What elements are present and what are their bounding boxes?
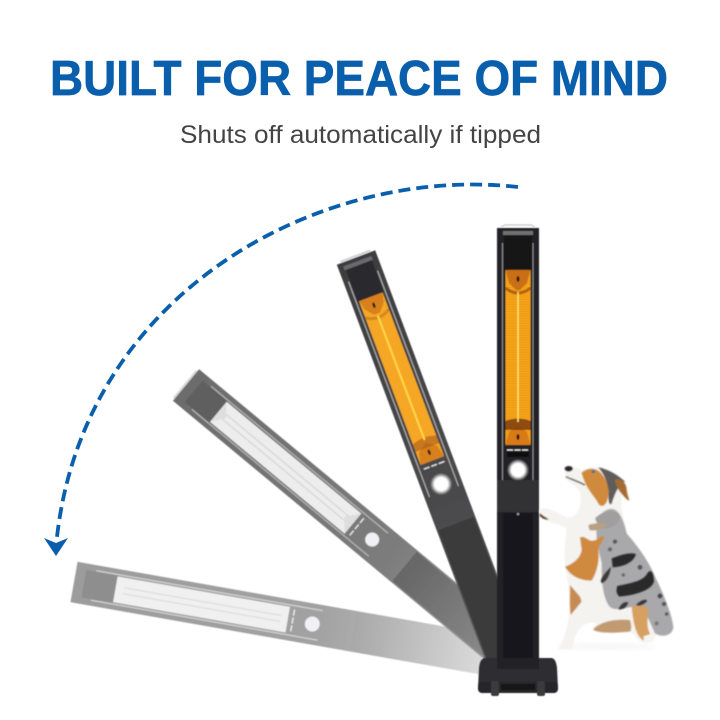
heater: tilted middle, off: [172, 369, 511, 659]
subtitle: Shuts off automatically if tipped: [180, 121, 541, 149]
heater: upright, glowing: [478, 225, 558, 696]
dog head: [565, 466, 630, 506]
arrow: dashed tip arc: [44, 185, 518, 556]
dog markings: [539, 513, 668, 625]
dog shadow: [557, 645, 657, 649]
dog: [539, 466, 673, 649]
dog body and chest: [539, 467, 673, 649]
heater base with wheels: [478, 658, 558, 696]
heater: tilted furthest, off: [70, 562, 486, 674]
heater: tilted near, glowing: [336, 249, 526, 665]
title: BUILT FOR PEACE OF MIND: [50, 52, 668, 106]
